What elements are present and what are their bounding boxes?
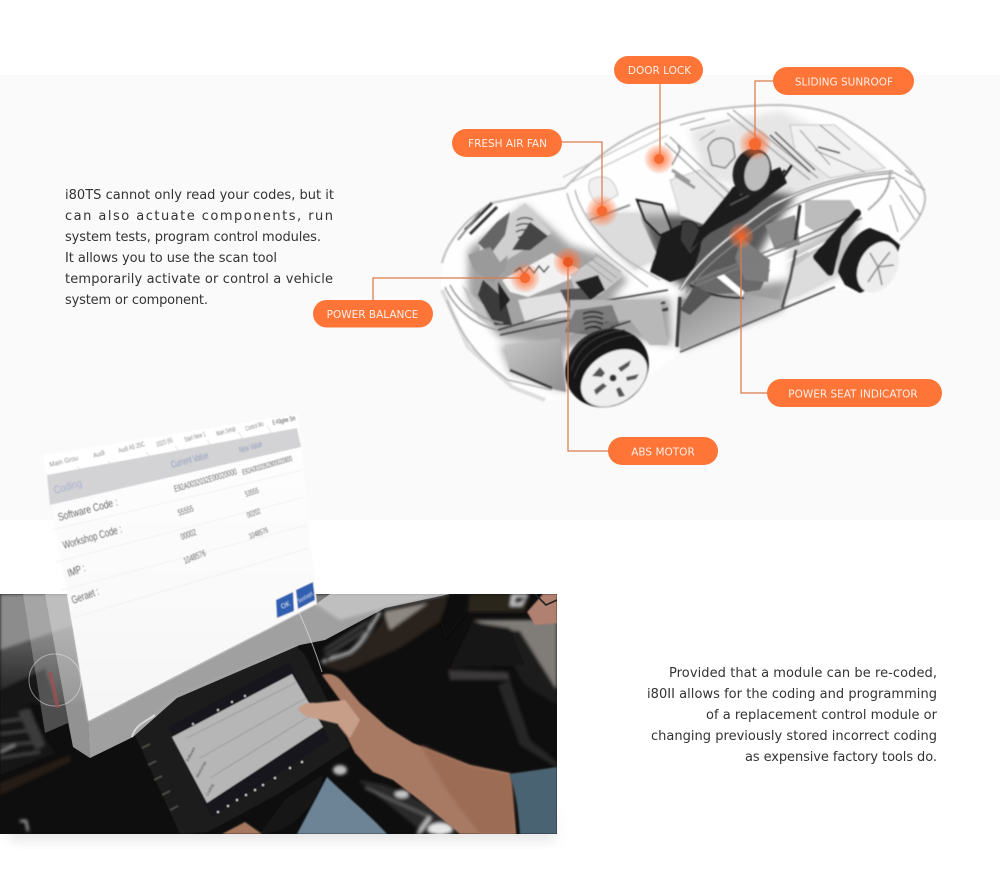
rear cabin floor	[670, 170, 740, 225]
gear console	[358, 780, 462, 834]
row: software code	[57, 455, 294, 524]
intro paragraph	[65, 188, 334, 308]
pillars	[677, 297, 680, 347]
hotspot: power seat indicator	[728, 223, 754, 249]
label: power seat indicator: POWER SEAT INDICATOR	[788, 388, 918, 400]
hotspot: power balance	[510, 263, 540, 293]
hotspot: sliding sunroof	[739, 128, 771, 160]
rear end lines	[890, 170, 925, 232]
lower hand	[222, 822, 262, 834]
tablet: Software	[184, 746, 197, 762]
central panel	[440, 594, 470, 640]
wheel well area	[570, 300, 668, 345]
photo shadow	[10, 815, 555, 841]
hotspot: ABS motor	[553, 247, 583, 277]
row dividers	[52, 470, 309, 618]
intro paragraph: system tests, program control modules.	[65, 230, 321, 245]
left wood trim	[0, 755, 70, 795]
row: geraet: Geraet :	[70, 586, 101, 607]
windscreen lines	[567, 190, 660, 287]
row: workshop code: 53555	[244, 487, 260, 499]
steering wheel	[260, 775, 323, 834]
left vent	[0, 705, 55, 775]
hotspot: door lock	[644, 144, 674, 174]
coding paragraph: i80II allows for the coding and programming	[647, 687, 937, 702]
near side roof rail	[680, 172, 893, 290]
battery box	[575, 275, 605, 300]
photo: technician using tablet in car	[0, 594, 557, 834]
central vent	[322, 615, 372, 662]
side grip buttons	[142, 744, 178, 810]
label: door lock	[614, 56, 703, 84]
tyre arch ribs	[817, 213, 857, 272]
engine bay	[458, 203, 552, 325]
sleeve	[509, 767, 557, 834]
row: software code: E92A0032032E00020000	[173, 466, 238, 494]
coding paragraph	[647, 666, 938, 765]
translucent strip left	[23, 594, 90, 758]
label: sliding sunroof	[773, 67, 914, 95]
face	[527, 594, 557, 625]
dash top	[300, 594, 450, 620]
label: ABS motor: ABS MOTOR	[631, 446, 695, 458]
intro paragraph: temporarily activate or control a vehicle	[65, 272, 333, 287]
coding paragraph: as expensive factory tools do.	[745, 750, 937, 765]
speaker disc	[727, 144, 777, 200]
roof struts	[665, 110, 818, 215]
coding paragraph: changing previously stored incorrect coding	[651, 729, 937, 744]
door lower	[680, 293, 782, 350]
coding screen: New Value	[238, 438, 263, 455]
car body glass	[442, 105, 925, 405]
label: sliding sunroof: SLIDING SUNROOF	[795, 76, 893, 88]
row: software code: E92A0032052800020800	[241, 455, 294, 477]
door handle	[716, 274, 745, 298]
rear glass	[790, 125, 885, 178]
coding header row	[47, 428, 301, 505]
translucent band	[88, 594, 450, 758]
door panel grey	[473, 620, 557, 688]
dark mid cabin	[690, 167, 787, 250]
engine cover	[502, 253, 585, 297]
label: door lock: DOOR LOCK	[628, 65, 692, 77]
intro paragraph: system or component.	[65, 293, 208, 308]
breadcrumb tabs: Main Setup	[216, 426, 237, 438]
coding paragraph: of a replacement control module or	[706, 708, 938, 723]
intro paragraph: It allows you to use the scan tool	[65, 251, 277, 266]
breadcrumb tabs: Control Mo	[245, 421, 265, 433]
row: IMP: 00002	[179, 527, 198, 542]
tablet: Workshop	[194, 760, 208, 778]
breadcrumb tabs: Main Grou	[49, 455, 79, 469]
jeans	[297, 777, 387, 834]
row: geraet: 1048576	[182, 548, 207, 566]
breadcrumb tabs	[49, 415, 297, 477]
label: power seat indicator	[767, 379, 942, 407]
tablet	[133, 645, 350, 834]
tablet screen	[172, 674, 323, 803]
row: IMP: 00202	[246, 508, 262, 520]
button: Senden	[296, 582, 315, 609]
leader lines	[373, 81, 773, 451]
breadcrumb tabs: 2020 (6)	[156, 437, 174, 449]
front seat	[650, 225, 703, 282]
engine block	[518, 290, 575, 322]
coding screen: Current Value	[170, 449, 210, 470]
chassis rails	[498, 290, 668, 335]
button: OK	[276, 592, 294, 618]
wood panel	[322, 596, 448, 672]
chrome trim	[322, 612, 380, 662]
breadcrumb tabs: Audi	[92, 449, 106, 460]
strut tower spring	[516, 218, 533, 238]
row: software code: Software Code :	[57, 496, 119, 524]
hand and arm	[322, 674, 516, 834]
beltline	[690, 213, 862, 288]
button: Senden: Sestept	[297, 591, 315, 605]
breadcrumb tabs: E-Kligine Sm	[272, 415, 297, 427]
row: IMP	[66, 508, 262, 580]
coding paragraph: Provided that a module can be re-coded,	[669, 666, 937, 681]
interior behind rear door	[805, 200, 858, 232]
dashboard	[585, 213, 658, 270]
tablet bezel	[168, 662, 330, 817]
seat frame	[637, 200, 672, 235]
breadcrumb tabs: Start New 1	[184, 431, 207, 444]
soft tonal base	[468, 110, 880, 392]
label: fresh air fan	[452, 129, 562, 157]
button: OK: OK	[280, 599, 292, 611]
row: geraet	[70, 527, 270, 607]
thumb	[298, 700, 360, 738]
car x-ray illustration	[442, 105, 925, 422]
holographic screen layers	[23, 594, 450, 758]
label: ABS motor	[608, 437, 718, 465]
front suspension spring	[583, 312, 603, 329]
row: IMP: IMP :	[66, 562, 87, 580]
bumper	[505, 338, 566, 392]
breadcrumb tabs: Audi A5 20C	[118, 441, 146, 455]
intake block	[468, 247, 508, 284]
background band	[0, 75, 1000, 520]
front wheel	[551, 314, 663, 422]
dashboard left	[0, 594, 90, 650]
tablet: Coding	[204, 783, 215, 796]
row: workshop code	[61, 487, 260, 552]
label: power balance: POWER BALANCE	[327, 309, 418, 321]
head restraint	[708, 138, 735, 168]
coding screen	[43, 414, 317, 722]
gauge ring	[29, 654, 81, 706]
intro paragraph: i80TS cannot only read your codes, but it	[65, 188, 334, 203]
hotspot: fresh air fan	[586, 195, 618, 227]
floor	[695, 262, 770, 295]
rear seat ribs	[762, 165, 792, 196]
rear wheel	[838, 228, 907, 300]
intro paragraph: can also actuate components, run	[65, 209, 333, 224]
screen sheet	[43, 414, 317, 722]
coding screen: Coding	[53, 478, 83, 497]
row: workshop code: Workshop Code :	[61, 523, 124, 552]
tablet toolbar	[217, 761, 303, 813]
label: fresh air fan: FRESH AIR FAN	[468, 138, 547, 150]
row: geraet: 1048576	[248, 527, 270, 541]
label: power balance	[313, 300, 433, 328]
wiper arm	[590, 205, 630, 220]
row: workshop code: 55555	[176, 503, 195, 518]
